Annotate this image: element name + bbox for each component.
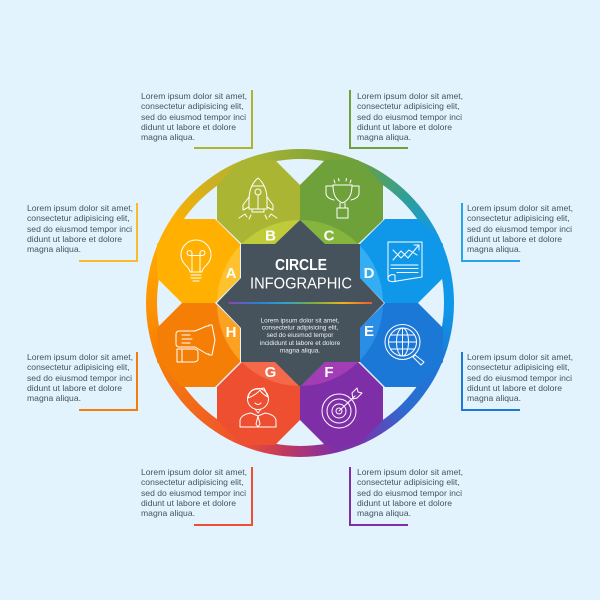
- text block C: sed do eiusmod tempor inci: [357, 112, 462, 122]
- bracket H: [79, 352, 138, 411]
- title: [250, 257, 352, 292]
- text block H: sed do eiusmod tempor inci: [27, 373, 132, 383]
- text block E: magna aliqua.: [467, 393, 521, 403]
- octagon C: [300, 160, 383, 244]
- text block B: sed do eiusmod tempor inci: [141, 112, 246, 122]
- letter A: A: [226, 265, 237, 282]
- text block D: [467, 203, 573, 254]
- icon: rocket: [239, 178, 277, 219]
- center text: Lorem ipsum dolor sit amet,: [261, 317, 340, 324]
- bracket C: [349, 90, 408, 149]
- text block F: didunt ut labore et dolore: [357, 498, 452, 508]
- center text: incididunt ut labore et dolore: [260, 340, 341, 347]
- text block F: [357, 467, 463, 518]
- text block F: sed do eiusmod tempor inci: [357, 488, 462, 498]
- text block G: consectetur adipisicing elit,: [141, 477, 244, 487]
- text block E: sed do eiusmod tempor inci: [467, 373, 572, 383]
- letter D: D: [364, 265, 375, 282]
- text block G: didunt ut labore et dolore: [141, 498, 236, 508]
- icon: megaphone: [176, 325, 215, 362]
- bracket E: [461, 352, 520, 411]
- text block A: [27, 203, 133, 254]
- letter E: E: [364, 323, 374, 340]
- text block A: sed do eiusmod tempor inci: [27, 224, 132, 234]
- text block G: magna aliqua.: [141, 508, 195, 518]
- text block C: consectetur adipisicing elit,: [357, 101, 460, 111]
- icon: target: [322, 388, 362, 428]
- icon: person: [240, 388, 276, 427]
- text block H: consectetur adipisicing elit,: [27, 362, 130, 372]
- center text: consectetur adipisicing elit,: [262, 325, 338, 332]
- text block D: sed do eiusmod tempor inci: [467, 224, 572, 234]
- text block F: Lorem ipsum dolor sit amet,: [357, 467, 463, 477]
- text block D: Lorem ipsum dolor sit amet,: [467, 203, 573, 213]
- icon: globe and magnifier: [385, 324, 424, 365]
- text block H: didunt ut labore et dolore: [27, 383, 122, 393]
- octagon G: [217, 362, 300, 445]
- text block B: magna aliqua.: [141, 132, 195, 142]
- title: INFOGRAPHIC: [250, 276, 352, 292]
- letter C: C: [324, 228, 335, 244]
- text block C: magna aliqua.: [357, 132, 411, 142]
- text block G: Lorem ipsum dolor sit amet,: [141, 467, 247, 477]
- text block E: [467, 352, 573, 403]
- text block D: didunt ut labore et dolore: [467, 234, 562, 244]
- center star: [217, 220, 384, 387]
- text block H: Lorem ipsum dolor sit amet,: [27, 352, 133, 362]
- ring: [146, 148, 454, 456]
- center text: [260, 317, 341, 354]
- icon: trophy: [326, 178, 359, 218]
- text block D: magna aliqua.: [467, 244, 521, 254]
- bracket D: [461, 203, 520, 262]
- text block C: Lorem ipsum dolor sit amet,: [357, 91, 463, 101]
- text block F: consectetur adipisicing elit,: [357, 477, 460, 487]
- icon: light bulb: [181, 240, 211, 281]
- circle diagram: [157, 160, 443, 445]
- title: CIRCLE: [275, 257, 327, 274]
- octagon A: [157, 219, 240, 303]
- center text: magna aliqua.: [280, 348, 320, 354]
- text block B: Lorem ipsum dolor sit amet,: [141, 91, 247, 101]
- bracket G: [194, 467, 253, 526]
- bracket A: [79, 203, 138, 262]
- text block A: consectetur adipisicing elit,: [27, 213, 130, 223]
- text block E: consectetur adipisicing elit,: [467, 362, 570, 372]
- octagon F: [300, 362, 383, 445]
- icon: report: [388, 242, 422, 282]
- text block A: Lorem ipsum dolor sit amet,: [27, 203, 133, 213]
- text block A: didunt ut labore et dolore: [27, 234, 122, 244]
- text block H: [27, 352, 133, 403]
- text block F: magna aliqua.: [357, 508, 411, 518]
- text block G: sed do eiusmod tempor inci: [141, 488, 246, 498]
- text block E: Lorem ipsum dolor sit amet,: [467, 352, 573, 362]
- octagon B: [217, 160, 300, 244]
- text block H: magna aliqua.: [27, 393, 81, 403]
- text block B: [141, 91, 247, 142]
- text block D: consectetur adipisicing elit,: [467, 213, 570, 223]
- text block B: didunt ut labore et dolore: [141, 122, 236, 132]
- center text: sed do eiusmod tempor: [267, 332, 334, 339]
- letter H: H: [226, 324, 236, 341]
- octagon D: [360, 219, 443, 303]
- text block E: didunt ut labore et dolore: [467, 383, 562, 393]
- text block G: [141, 467, 247, 518]
- text block B: consectetur adipisicing elit,: [141, 101, 244, 111]
- letter F: F: [324, 364, 334, 381]
- bracket F: [349, 467, 408, 526]
- letter B: B: [265, 228, 276, 244]
- letter G: G: [265, 364, 276, 381]
- text block C: [357, 91, 463, 142]
- octagon E: [360, 303, 443, 387]
- text block C: didunt ut labore et dolore: [357, 122, 452, 132]
- text block A: magna aliqua.: [27, 244, 81, 254]
- bracket B: [194, 90, 253, 149]
- rainbow divider: [228, 302, 372, 304]
- octagon H: [157, 303, 240, 387]
